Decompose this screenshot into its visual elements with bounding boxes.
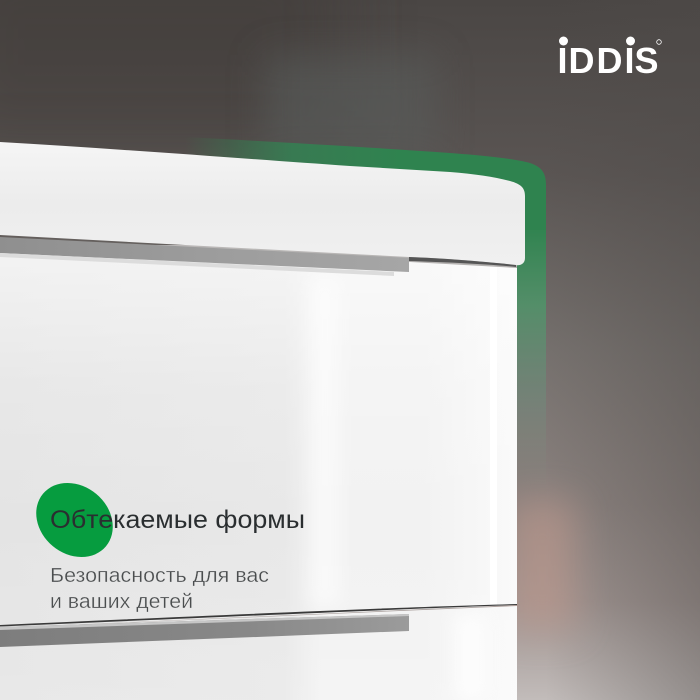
- basin underside shadow: [409, 257, 516, 267]
- logo: iDDIS: IDDIS: [558, 40, 659, 81]
- lower drawer handle: [0, 614, 409, 647]
- lower drawer seam: [0, 604, 517, 626]
- cabinet lower drawer: [0, 606, 517, 700]
- basin countertop: [0, 142, 525, 265]
- green blob accent: [21, 468, 128, 572]
- green contour highlight: [185, 137, 546, 495]
- subtext: Безопасность для вас: [50, 565, 269, 587]
- subtext: и ваших детей: [50, 591, 193, 613]
- heading: Обтекаемые формы: [50, 506, 305, 534]
- cabinet upper drawer: [0, 245, 517, 628]
- cabinet gloss reflections: [0, 245, 517, 700]
- upper drawer handle: [0, 237, 409, 276]
- subtext: [50, 565, 269, 613]
